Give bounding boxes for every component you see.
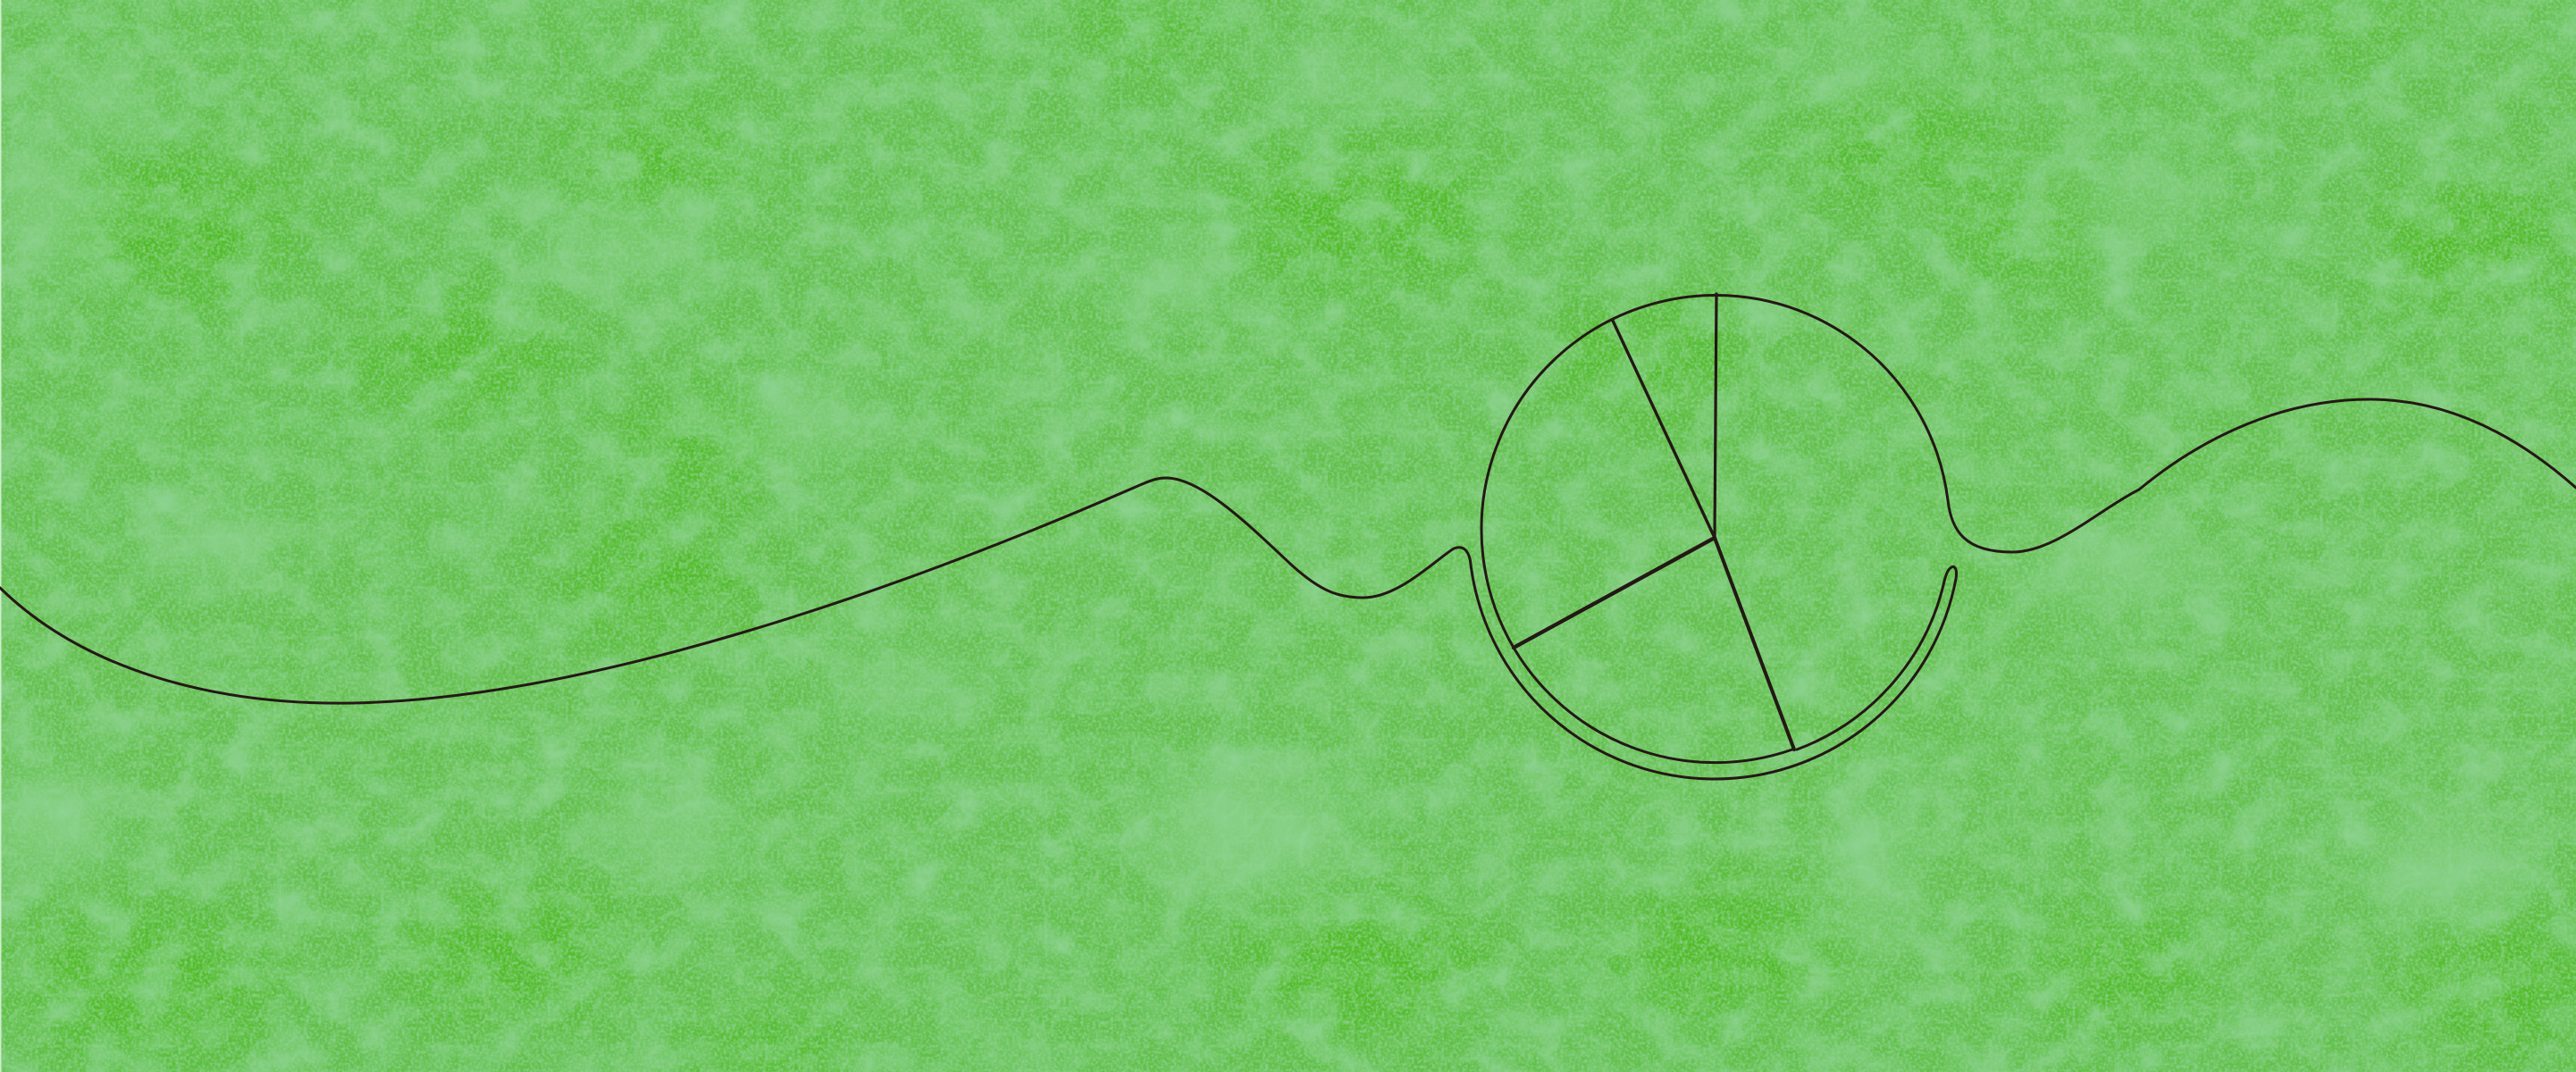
pie spoke to lower right xyxy=(1715,538,1794,750)
pie spoke to top xyxy=(1715,294,1716,538)
right wavy line leaving the pie xyxy=(1948,399,2576,552)
pie spoke to upper left xyxy=(1613,321,1715,538)
left wavy line running into the swoosh around the pie xyxy=(0,478,1957,779)
pie spoke to lower left xyxy=(1514,538,1715,648)
pie chart circle outline xyxy=(1481,295,1948,763)
continuous black line forming the pie chart xyxy=(0,294,2576,779)
